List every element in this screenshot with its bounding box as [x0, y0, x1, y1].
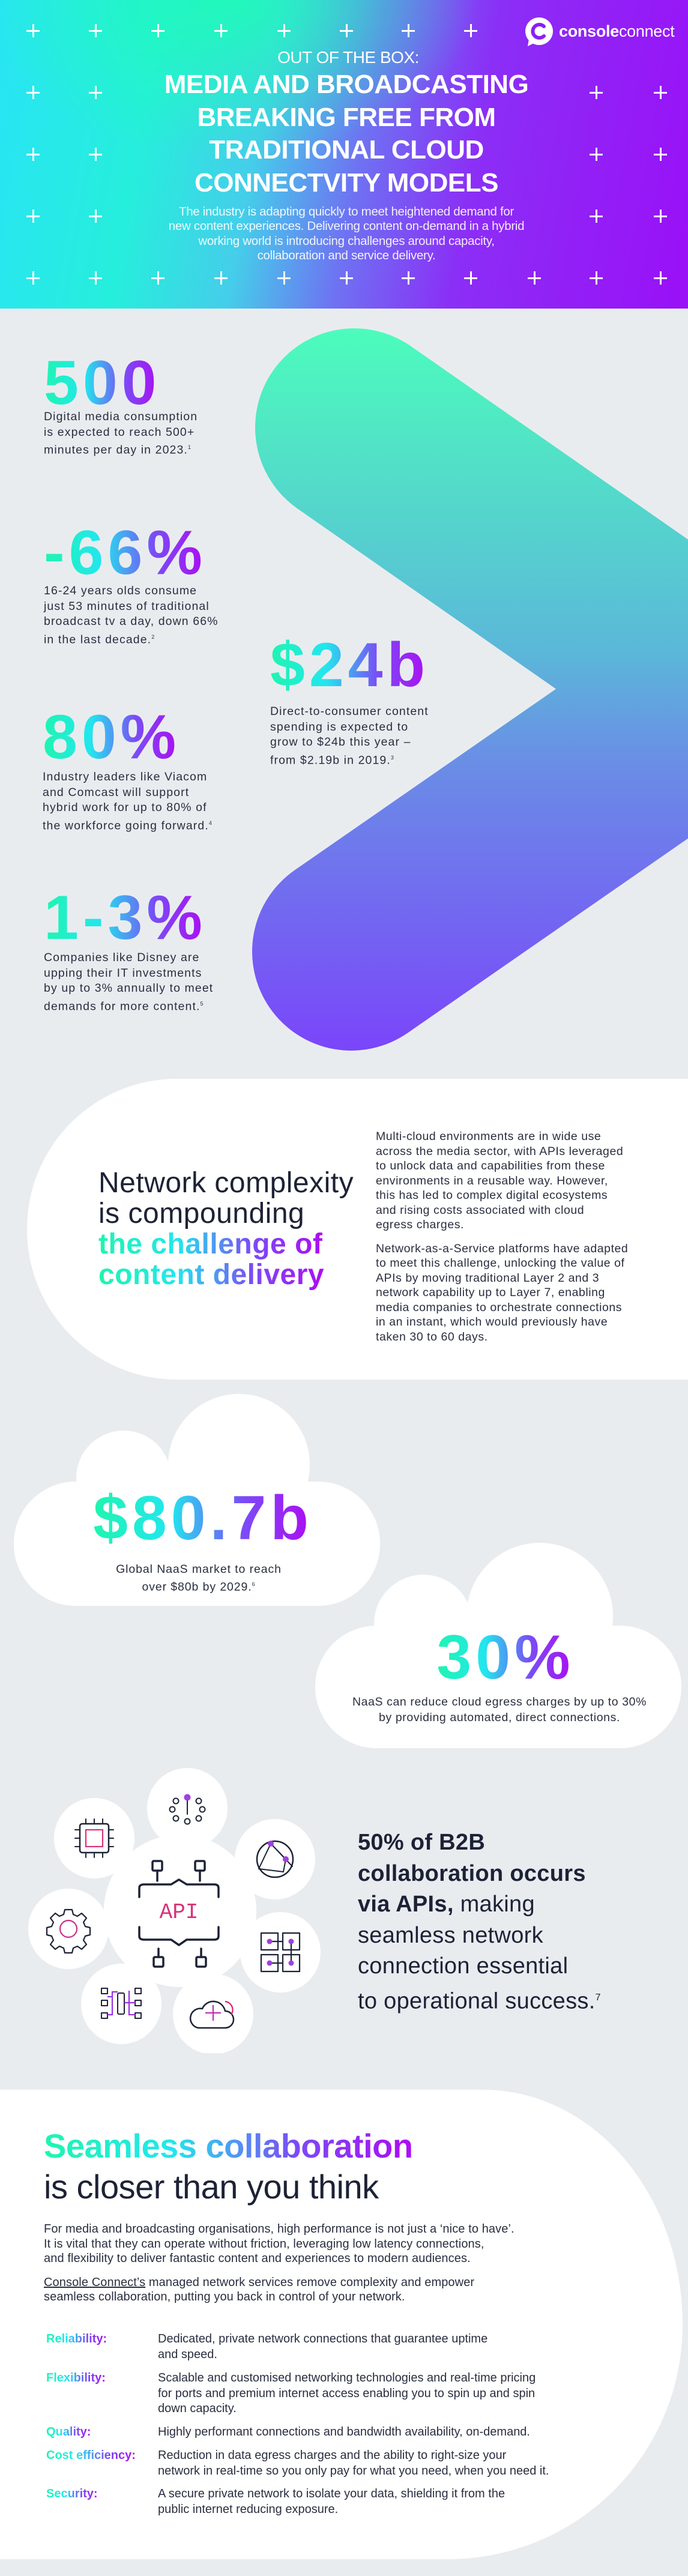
row: security: A secure private network to isolate your data, shielding it from the: [158, 2487, 505, 2500]
icon cluster: API: [28, 1768, 321, 2053]
stat: 500: is expected to reach 500+: [44, 425, 195, 438]
stat: -66%: 16-24 years olds consume: [44, 584, 197, 597]
caption: [116, 1563, 282, 1593]
stat: 80%: 80%: [43, 702, 180, 772]
body text: Network-as-a-Service platforms have adapted: [376, 1241, 628, 1255]
row: security: [46, 2487, 505, 2515]
stat: 1-3%: [44, 883, 213, 1013]
header banner: [0, 0, 688, 309]
body text: to unlock data and capabilities from these: [376, 1159, 605, 1172]
stat: 80%: the workforce going forward.4: [43, 819, 213, 832]
intro text: Console Connect’s managed network services remove complexity and empower: [44, 2276, 474, 2289]
body text: environments in a reusable way. However,: [376, 1174, 608, 1187]
B2B statement: 50% of B2B: [358, 1830, 485, 1855]
stat: -66%: [43, 518, 219, 646]
row: cost efficiency: Reduction in data egress charges and the ability to right-size your: [158, 2449, 506, 2462]
caption: [352, 1695, 647, 1724]
row: cost efficiency: Cost efficiency:: [46, 2449, 136, 2462]
stat: 80%: and Comcast will support: [43, 785, 189, 798]
intro text: and flexibility to deliver fantastic content and experiences to modern audiences.: [44, 2252, 471, 2265]
stat: 1-3%: 1-3%: [44, 883, 207, 953]
caption: NaaS can reduce cloud egress charges by up to 30%: [352, 1695, 647, 1709]
title: TRADITIONAL CLOUD: [209, 135, 484, 164]
intro text: For media and broadcasting organisations, high performance is not just a ‘nice to have’.: [44, 2222, 514, 2236]
row: security: Security:: [46, 2487, 98, 2500]
title: MEDIA AND BROADCASTING: [164, 70, 528, 99]
caption: over $80b by 2029.6: [142, 1580, 256, 1593]
body text: to meet this challenge, unlocking the value of: [376, 1256, 624, 1270]
B2B statement: to operational success.7: [358, 1989, 601, 2014]
benefits list: [46, 2332, 549, 2515]
stat: 1-3%: by up to 3% annually to meet: [44, 982, 213, 995]
chevron graphic: [252, 328, 688, 1051]
kicker: OUT OF THE BOX:: [277, 48, 419, 67]
heading: is compounding: [98, 1198, 304, 1229]
logo: [525, 17, 675, 46]
stat: -66%: -66%: [44, 518, 207, 588]
caption: Global NaaS market to reach: [116, 1563, 282, 1576]
row: reliability: Dedicated, private network connections that guarantee uptime: [158, 2332, 487, 2345]
heading: [44, 2127, 413, 2206]
body text: this has led to complex digital ecosystems: [376, 1189, 608, 1202]
row: security: public internet reducing exposure.: [158, 2502, 338, 2515]
row: flexibility: down capacity.: [158, 2402, 237, 2415]
stat: $24b: Direct-to-consumer content: [270, 705, 429, 718]
stat number: 30%: [436, 1623, 575, 1692]
intro text: seamless collaboration, putting you back in control of your network.: [44, 2290, 405, 2303]
panel: seamless collaboration: [0, 2090, 683, 2559]
body text: Multi-cloud environments are in wide use: [376, 1130, 601, 1143]
B2B statement: [358, 1830, 601, 2014]
stat: $24b: $24b: [270, 630, 429, 700]
title: BREAKING FREE FROM: [197, 103, 496, 132]
row: flexibility: Flexibility:: [46, 2371, 106, 2384]
B2B statement: collaboration occurs: [358, 1861, 586, 1886]
body text: in an instant, which would previously have: [376, 1315, 608, 1329]
panel: network complexity: [27, 1079, 688, 1380]
stat: $24b: grow to $24b this year –: [270, 735, 411, 749]
heading: content delivery: [98, 1259, 324, 1291]
row: reliability: and speed.: [158, 2347, 217, 2360]
stat: -66%: in the last decade.2: [44, 633, 155, 646]
heading: the challenge of: [98, 1228, 322, 1260]
intro text: [44, 2222, 514, 2303]
stat: 80%: Industry leaders like Viacom: [43, 770, 207, 783]
row: quality: Highly performant connections and bandwidth availability, on-demand.: [158, 2425, 530, 2439]
stat number: $80.7b: [93, 1483, 313, 1553]
row: flexibility: Scalable and customised networking technologies and real-time pricing: [158, 2371, 536, 2384]
stat: $24b: [270, 630, 429, 767]
heading: Network complexity: [98, 1167, 354, 1199]
caption: by providing automated, direct connections.: [379, 1711, 620, 1724]
intro paragraph: new content experiences. Delivering content on-demand in a hybrid: [169, 219, 524, 233]
decorative plus grid: [26, 24, 667, 285]
icon cluster: API: API: [160, 1900, 198, 1925]
stat: 500: [44, 348, 198, 456]
stat: 80%: hybrid work for up to 80% of: [43, 801, 207, 814]
stat: 500: Digital media consumption: [44, 410, 198, 423]
body text: taken 30 to 60 days.: [376, 1330, 488, 1344]
row: cost efficiency: network in real-time so you only pay for what you need, when you need it.: [158, 2464, 549, 2477]
stat: $24b: from $2.19b in 2019.3: [270, 753, 394, 767]
intro paragraph: working world is introducing challenges around capacity,: [198, 234, 495, 248]
intro paragraph: The industry is adapting quickly to meet heightened demand for: [179, 205, 514, 219]
stat: 1-3%: upping their IT investments: [44, 967, 202, 980]
body text: egress charges.: [376, 1218, 464, 1231]
body text: [376, 1130, 628, 1344]
row: flexibility: [46, 2371, 536, 2415]
stat: -66%: just 53 minutes of traditional: [44, 599, 210, 612]
B2B statement: seamless network: [358, 1923, 543, 1948]
row: reliability: [46, 2332, 487, 2360]
heading: is closer than you think: [44, 2168, 379, 2206]
body text: and rising costs associated with cloud: [376, 1203, 584, 1216]
row: quality: Quality:: [46, 2425, 91, 2439]
cloud: 30%: [315, 1543, 681, 1748]
stat: 1-3%: demands for more content.5: [44, 1000, 204, 1013]
heading: [98, 1167, 354, 1291]
body text: across the media sector, with APIs leveraged: [376, 1144, 623, 1157]
stat: $24b: spending is expected to: [270, 720, 408, 734]
intro paragraph: [169, 205, 524, 262]
B2B statement: via APIs, making: [358, 1892, 535, 1917]
title: CONNECTVITY MODELS: [195, 168, 498, 198]
heading: Seamless collaboration: [44, 2127, 413, 2165]
body text: network capability up to Layer 7, enabling: [376, 1286, 605, 1299]
B2B statement: connection essential: [358, 1953, 568, 1979]
intro paragraph: collaboration and service delivery.: [258, 249, 435, 262]
cloud: $80.7b: [14, 1394, 380, 1606]
stat: 1-3%: Companies like Disney are: [44, 951, 199, 964]
stat: 80%: [43, 702, 213, 832]
stat: 500: 500: [44, 348, 161, 418]
row: cost efficiency: [46, 2449, 549, 2477]
logo: consoleconnect: [559, 22, 674, 40]
title: [164, 70, 528, 198]
body text: media companies to orchestrate connections: [376, 1300, 622, 1314]
row: flexibility: for ports and premium internet access enabling you to spin up and spin: [158, 2387, 535, 2400]
stat: -66%: broadcast tv a day, down 66%: [44, 615, 219, 628]
row: reliability: Reliability:: [46, 2332, 107, 2345]
body text: APIs by moving traditional Layer 2 and 3: [376, 1271, 599, 1285]
stat: 500: minutes per day in 2023.1: [44, 443, 192, 456]
intro text: It is vital that they can operate without friction, leveraging low latency connections,: [44, 2237, 484, 2251]
